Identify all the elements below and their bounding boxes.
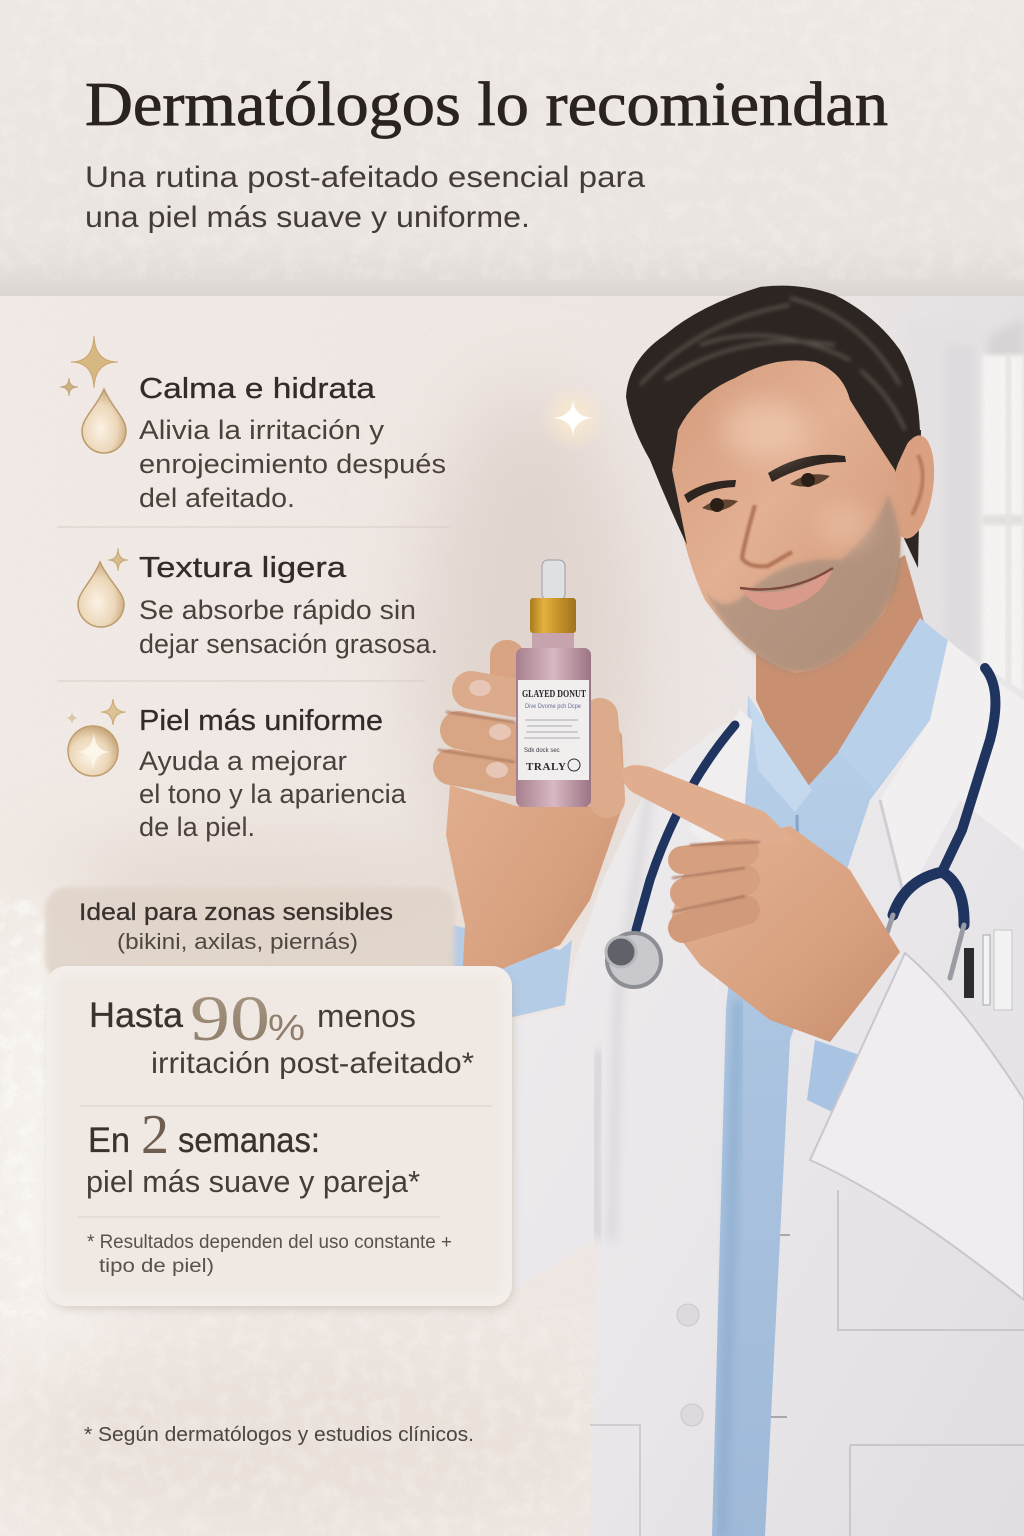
- stat: 90 percent: irritación post-afeitado*: [151, 1047, 475, 1080]
- body text: de la piel.: [139, 812, 255, 842]
- badge: zonas sensibles: Ideal para zonas sensibles: [79, 899, 393, 926]
- window and wall shading: [905, 296, 1024, 745]
- card footnote: [87, 1232, 452, 1277]
- face: [668, 353, 901, 673]
- body text: [139, 595, 438, 659]
- stat: 90 percent: [89, 983, 475, 1080]
- heading: Calma e hidrata: [139, 373, 376, 405]
- badge: zonas sensibles: [45, 887, 455, 982]
- hair behind ear: [885, 430, 921, 568]
- beard: [704, 495, 900, 671]
- pens in pocket: [964, 930, 1012, 1010]
- stat: 2 weeks: [86, 1104, 420, 1199]
- body text: [139, 746, 406, 842]
- serum bottle: TRALY: [526, 761, 566, 773]
- body text: Ayuda a mejorar: [139, 746, 347, 776]
- icon: drop with sparkle: [78, 548, 128, 627]
- body text: el tono y la apariencia: [139, 779, 406, 809]
- serum bottle: Dive Dvome pch Dcpe: [525, 704, 582, 710]
- body text: enrojecimiento después: [139, 449, 446, 479]
- body text: dejar sensación grasosa.: [139, 629, 438, 659]
- top band: [0, 0, 1024, 296]
- body text: Se absorbe rápido sin: [139, 595, 416, 625]
- panel: results card: [46, 966, 512, 1308]
- neck: [756, 555, 925, 795]
- footnote: * Según dermatólogos y estudios clínicos.: [84, 1424, 474, 1446]
- lab coat: [513, 640, 1024, 1536]
- icon: sparkles and drop: [60, 336, 126, 453]
- stat: 90 percent: Hasta: [89, 996, 184, 1035]
- body text: Alivia la irritación y: [139, 415, 385, 445]
- stethoscope: [606, 668, 995, 987]
- hair: [626, 286, 920, 545]
- body text: del afeitado.: [139, 483, 295, 513]
- body text: [139, 415, 446, 513]
- facial features: [684, 400, 871, 610]
- benefit: Calma e hidrata: [60, 336, 446, 513]
- blue shirt cuff: [807, 1040, 875, 1118]
- card footnote: * Resultados dependen del uso constante +: [87, 1232, 452, 1253]
- card footnote: tipo de piel): [99, 1256, 214, 1277]
- sparkle glow: [539, 384, 607, 452]
- stat: 2 weeks: semanas:: [178, 1121, 320, 1160]
- serum bottle: [516, 560, 591, 807]
- serum bottle: GLAYED DONUT: [522, 689, 586, 700]
- pointing hand: [622, 765, 900, 1042]
- shirt: [712, 618, 948, 1536]
- stat: 90 percent: 90: [190, 983, 270, 1055]
- subtitle: [85, 161, 645, 234]
- ear: [886, 433, 940, 541]
- serum bottle: Sdk dock sec: [524, 748, 560, 754]
- subtitle: Una rutina post-afeitado esencial para: [85, 161, 645, 194]
- badge: zonas sensibles: (bikini, axilas, piernás): [117, 929, 358, 954]
- heading: Textura ligera: [139, 552, 347, 584]
- stat: 2 weeks: En: [88, 1121, 130, 1160]
- stat: 90 percent: menos: [317, 998, 416, 1034]
- left sleeve cuff: [448, 925, 572, 1017]
- lapels: [690, 640, 1024, 1000]
- stat: 2 weeks: piel más suave y pareja*: [86, 1164, 420, 1199]
- left hand: [438, 640, 625, 985]
- stat: 2 weeks: 2: [141, 1104, 169, 1166]
- benefit: Textura ligera: [78, 548, 438, 659]
- benefit: Piel más uniforme: [65, 699, 406, 842]
- subtitle: una piel más suave y uniforme.: [85, 201, 530, 234]
- heading: Piel más uniforme: [139, 705, 383, 737]
- coat sleeve: [810, 953, 1024, 1300]
- title: Dermatólogos lo recomiendan: [85, 71, 888, 139]
- icon: orb with sparkles: [65, 699, 126, 776]
- stat: 90 percent: %: [268, 1007, 305, 1048]
- doctor figure: [438, 286, 1024, 1536]
